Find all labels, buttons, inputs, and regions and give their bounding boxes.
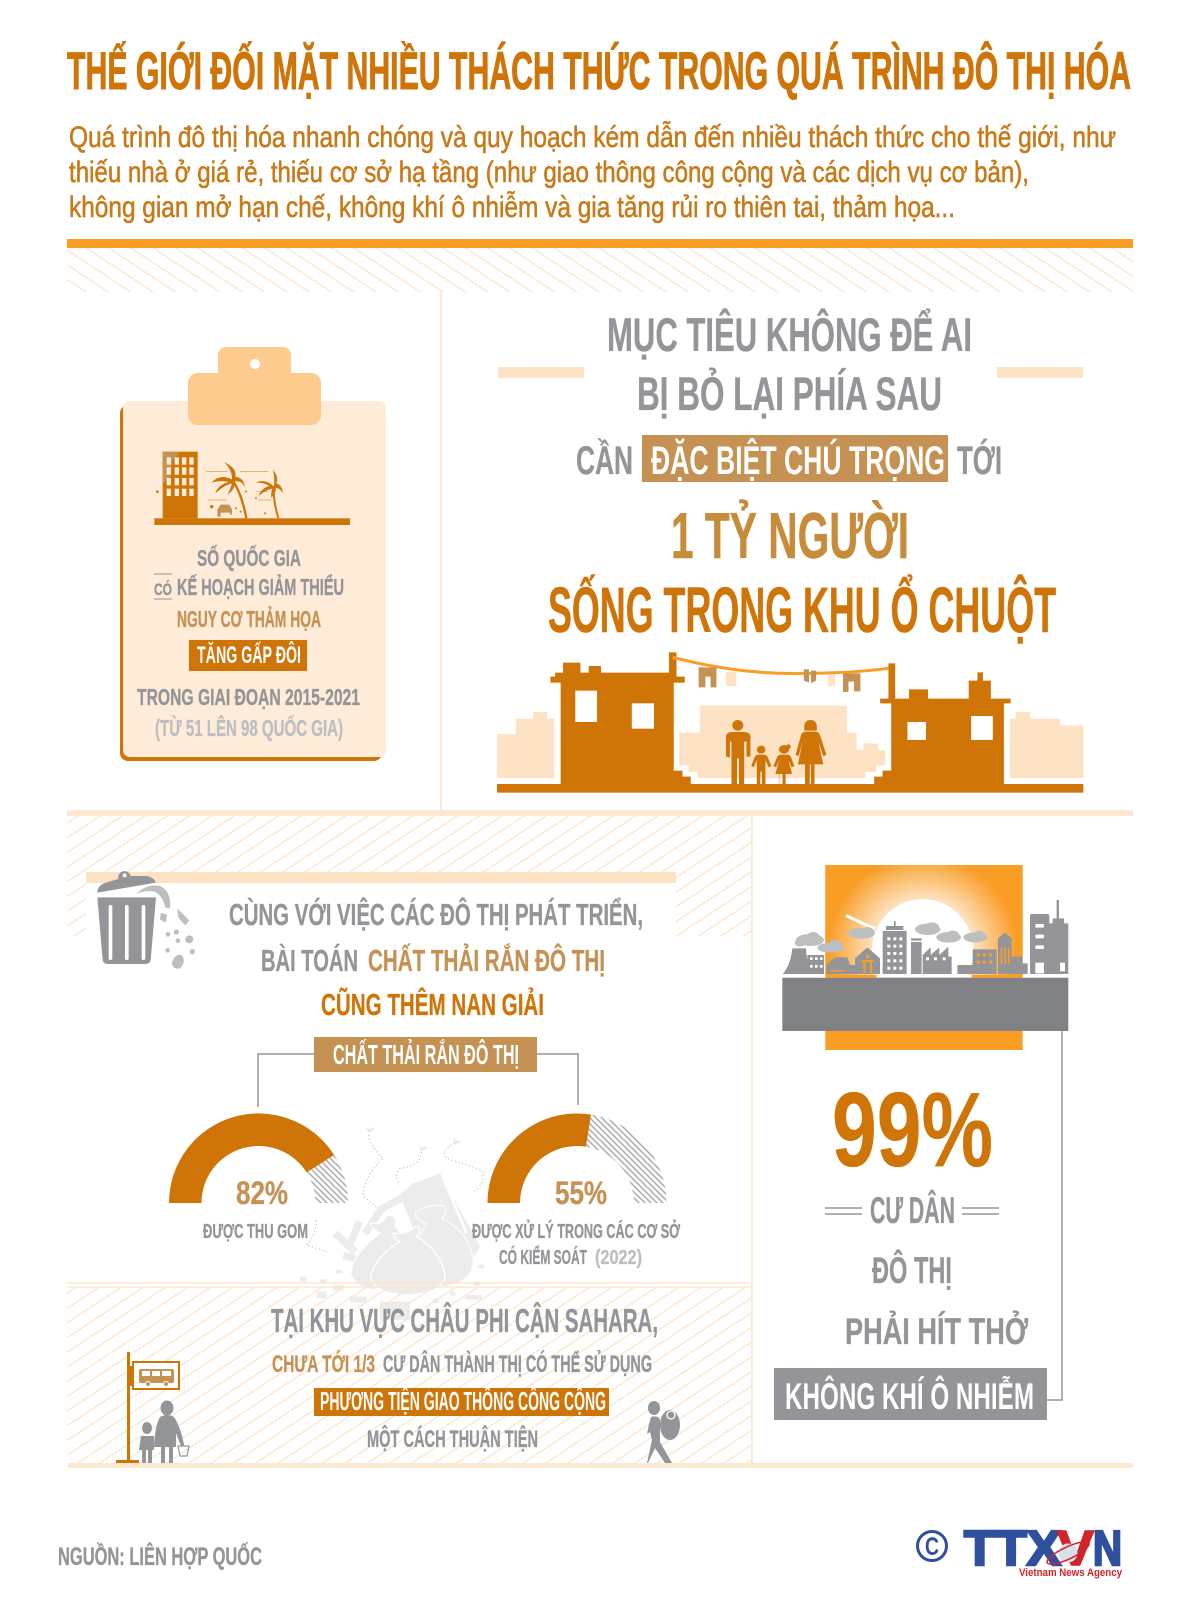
chart: 82 percent collected bbox=[169, 1113, 348, 1243]
callout: public transport: PHƯƠNG TIỆN GIAO THÔNG CÔNG CỘNG bbox=[320, 1386, 606, 1416]
text: urban residents: CƯ DÂN bbox=[870, 1189, 955, 1231]
callout: doubled bbox=[189, 640, 307, 671]
text: urban residents bbox=[825, 1189, 999, 1231]
text: under one third: CƯ DÂN THÀNH THỊ CÓ THỂ SỬ DỤNG bbox=[383, 1349, 652, 1378]
text: under one third bbox=[272, 1349, 652, 1378]
logo: TTXVN: Vietnam News Agency bbox=[1019, 1567, 1123, 1579]
text: convenient: MỘT CÁCH THUẬN TIỆN bbox=[367, 1425, 538, 1453]
intro text bbox=[69, 121, 1116, 224]
text: urban: ĐÔ THỊ bbox=[872, 1249, 952, 1291]
chart: 55 percent treated: (2022) bbox=[595, 1247, 642, 1269]
intro text: không gian mở hạn chế, không khí ô nhiễm và gia tăng rủi ro thiên tai, thảm họa... bbox=[69, 191, 955, 224]
chart: 55 percent treated: 55% bbox=[555, 1175, 607, 1211]
icon: hiker with backpack bbox=[647, 1401, 680, 1463]
text: special attention: TỚI bbox=[957, 437, 1002, 483]
icon: bus stop bbox=[116, 1352, 179, 1463]
label: urban solid waste bbox=[314, 1037, 537, 1072]
heading: waste line 2: BÀI TOÁN bbox=[261, 943, 358, 978]
text: with reduction plan bbox=[154, 572, 344, 600]
heading: waste line 2: CHẤT THẢI RẮN ĐÔ THỊ bbox=[368, 942, 605, 978]
heading: leave no one behind: MỤC TIÊU KHÔNG ĐỂ AI bbox=[607, 308, 972, 361]
text: with reduction plan: KẾ HOẠCH GIẢM THIỂU bbox=[177, 572, 344, 600]
text: must breathe: PHẢI HÍT THỞ bbox=[845, 1310, 1028, 1352]
callout: public transport bbox=[314, 1386, 609, 1416]
panel: disaster risk clipboard bbox=[120, 347, 386, 761]
icon: clip bbox=[188, 347, 321, 425]
callout: polluted air: KHÔNG KHÍ Ô NHIỄM bbox=[785, 1375, 1034, 1417]
text: special attention: ĐẶC BIỆT CHÚ TRỌNG bbox=[651, 437, 945, 483]
label: urban solid waste: CHẤT THẢI RẮN ĐÔ THỊ bbox=[333, 1038, 519, 1070]
chart: 55 percent treated bbox=[472, 1113, 681, 1269]
text: from 51 to 98: (TỪ 51 LÊN 98 QUỐC GIA) bbox=[155, 714, 343, 741]
heading: leave no one behind bbox=[498, 308, 1083, 420]
panel: urban solid waste bbox=[97, 871, 681, 1269]
text: special attention: CẦN bbox=[576, 437, 633, 483]
panel: air pollution bbox=[774, 865, 1068, 1420]
stat: one billion people: 1 TỶ NGƯỜI bbox=[671, 499, 909, 572]
text: period: TRONG GIAI ĐOẠN 2015-2021 bbox=[137, 684, 360, 710]
heading: waste line 1: CÙNG VỚI VIỆC CÁC ĐÔ THỊ PHÁT TRIỂN, bbox=[229, 896, 643, 932]
logo: TTXVN: N bbox=[1093, 1522, 1122, 1576]
icon: trash can bbox=[97, 871, 195, 969]
chart: 82 percent collected: 82% bbox=[236, 1175, 288, 1211]
chart: 55 percent treated: ĐƯỢC XỬ LÝ TRONG CÁC CƠ SỞ bbox=[472, 1219, 681, 1243]
logo: TTXVN: TTX bbox=[964, 1522, 1061, 1576]
heading: waste line 3: CŨNG THÊM NAN GIẢI bbox=[321, 986, 544, 1022]
logo: TTXVN: V bbox=[1057, 1522, 1094, 1576]
callout: doubled: TĂNG GẤP ĐÔI bbox=[197, 641, 301, 669]
heading: waste line 2 bbox=[261, 942, 605, 978]
text: countries line: SỐ QUỐC GIA bbox=[197, 544, 301, 571]
text: sahara: TẠI KHU VỰC CHÂU PHI CẬN SAHARA, bbox=[271, 1302, 658, 1339]
text: disaster risk: NGUY CƠ THẢM HỌA bbox=[177, 604, 321, 632]
panel: public transport in Sub-Saharan Africa bbox=[67, 1288, 1133, 1468]
chart: 82 percent collected: ĐƯỢC THU GOM bbox=[203, 1221, 308, 1243]
stat: 99 percent: 99% bbox=[832, 1071, 993, 1189]
heading: leave no one behind: BỊ BỎ LẠI PHÍA SAU bbox=[637, 367, 942, 420]
callout: polluted air bbox=[774, 1368, 1047, 1420]
text: special attention bbox=[576, 435, 1002, 483]
source: NGUỒN: LIÊN HỢP QUỐC bbox=[58, 1541, 262, 1571]
icon: woman and child bbox=[139, 1400, 189, 1463]
logo: TTXVN bbox=[918, 1522, 1123, 1579]
logo: TTXVN: C bbox=[925, 1533, 939, 1561]
text: under one third: CHƯA TỚI 1/3 bbox=[272, 1350, 375, 1378]
illustration: slum houses and family bbox=[497, 652, 1083, 793]
text: with reduction plan: CÓ bbox=[154, 580, 172, 599]
illustration: faded trash bags bbox=[300, 1127, 484, 1320]
icon: storm over building and palms bbox=[154, 452, 350, 525]
illustration: polluted city bbox=[782, 865, 1068, 1050]
chart: 55 percent treated: CÓ KIỂM SOÁT bbox=[499, 1245, 587, 1269]
